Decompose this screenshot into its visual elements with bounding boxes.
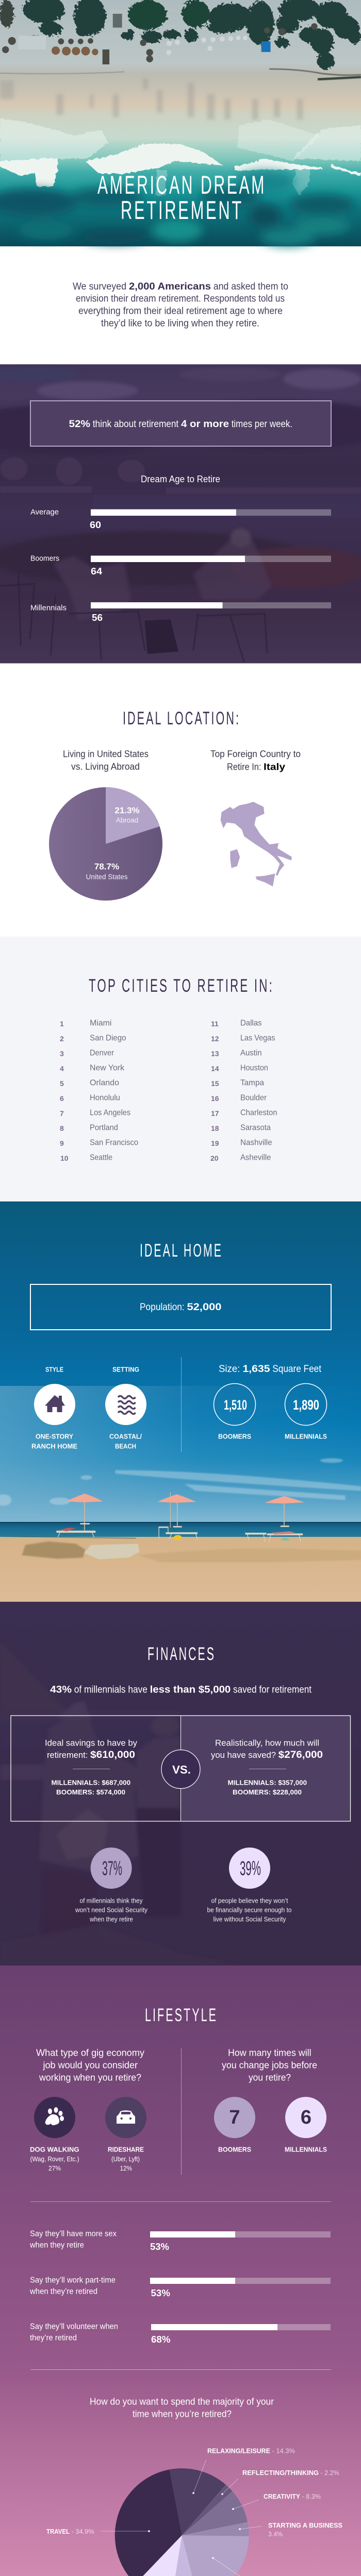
intro paragraph: and asked them to xyxy=(211,281,288,292)
heading: ideal home: IDEAL HOME xyxy=(140,1241,223,1261)
pie chart: how to spend time: RELAXING/LEISURE xyxy=(207,2448,270,2455)
pie chart: how to spend time: 3.4% xyxy=(268,2531,283,2538)
ranked list: cities 11-20: Las Vegas xyxy=(240,1033,275,1043)
stat: 39% social security xyxy=(207,1848,292,1923)
job change question: you change jobs before xyxy=(222,2060,317,2070)
ranked list: cities 1-10: 9 xyxy=(60,1139,64,1147)
stat: 37% social security xyxy=(75,1848,147,1923)
gig economy question: working when you retire? xyxy=(39,2072,141,2082)
pie chart: how to spend time: TRAVEL xyxy=(46,2528,70,2535)
gig economy question: What type of gig economy xyxy=(36,2047,145,2058)
bar chart: dream age to retire: Millennials xyxy=(30,604,67,612)
gig option: rideshare: RIDESHARE xyxy=(108,2145,144,2154)
realistic savings: BOOMERS: $228,000 xyxy=(233,1788,302,1796)
title: RETIREMENT xyxy=(121,196,243,225)
icon: waves xyxy=(118,1396,135,1414)
job change question xyxy=(222,2047,317,2082)
panel: ideal home xyxy=(0,1201,361,1602)
gig option: rideshare xyxy=(105,2097,146,2172)
stat: 39% social security: be financially secure enough to xyxy=(207,1906,292,1913)
ranked list: cities 1-10: San Diego xyxy=(90,1033,126,1043)
ranked list: cities 1-10: Portland xyxy=(90,1123,118,1132)
question: spending time: time when you’re retired? xyxy=(133,2408,232,2419)
intro paragraph: they’d like to be living when they retire. xyxy=(101,318,259,329)
ranked list: cities 1-10: 4 xyxy=(60,1064,64,1073)
ranked list: cities 1-10: 3 xyxy=(60,1049,64,1058)
realistic savings xyxy=(211,1738,323,1796)
question: spending time xyxy=(90,2396,274,2419)
ranked list: cities 11-20: Asheville xyxy=(240,1153,271,1162)
icon: paw xyxy=(45,2107,64,2125)
panel: ideal location: Top Foreign Country to xyxy=(210,748,301,759)
ranked list: cities 1-10: Seattle xyxy=(90,1153,112,1162)
ranked list: cities 11-20: 17 xyxy=(211,1109,219,1117)
job change question: you retire? xyxy=(249,2072,291,2082)
setting: coastal beach: BEACH xyxy=(115,1443,136,1450)
style: one-story ranch home: ONE-STORY xyxy=(36,1432,73,1440)
pie chart title: Living in United States xyxy=(63,748,149,759)
style: one-story ranch home: RANCH HOME xyxy=(31,1443,77,1450)
ranked list: cities 11-20: 19 xyxy=(211,1139,219,1147)
stat: 37% social security: of millennials think they xyxy=(79,1897,143,1904)
job changes: boomers: BOOMERS xyxy=(218,2145,251,2154)
callout: 52% box: times per week. xyxy=(229,418,292,430)
realistic savings: Realistically, how much will xyxy=(215,1738,319,1748)
gig option: dog walking xyxy=(30,2097,79,2172)
stat: 37% social security: 37% xyxy=(102,1858,122,1879)
gig option: dog walking: 27% xyxy=(48,2165,61,2172)
bar chart: dream age to retire: Boomers xyxy=(30,554,59,563)
ranked list: cities 11-20: 13 xyxy=(211,1049,219,1058)
stat: 39% social security: 39% xyxy=(240,1858,261,1879)
intro paragraph: 2,000 Americans xyxy=(129,281,211,292)
icon: car xyxy=(117,2110,135,2124)
stat: 43% of millennials: 43% xyxy=(50,1684,72,1695)
ideal savings xyxy=(45,1738,137,1796)
bar chart: retirement plans: Say they’ll work part-time xyxy=(30,2276,116,2284)
ranked list: cities 11-20: 12 xyxy=(211,1035,219,1043)
gig option: rideshare: 12% xyxy=(120,2165,132,2172)
ranked list: cities 1-10: 6 xyxy=(60,1094,64,1103)
ideal savings: BOOMERS: $574,000 xyxy=(56,1788,125,1796)
ideal savings: $610,000 xyxy=(90,1750,135,1760)
pie chart: US vs abroad: 78.7% xyxy=(94,861,119,872)
pie chart: US vs abroad xyxy=(49,787,162,901)
size stats: 1,510 xyxy=(224,1397,247,1413)
realistic savings: MILLENNIALS: $357,000 xyxy=(228,1778,307,1787)
callout: population: 52,000 xyxy=(187,1301,222,1313)
pie chart: US vs abroad: United States xyxy=(86,873,128,881)
comparison box xyxy=(11,1716,351,1821)
ranked list: cities 1-10: Los Angeles xyxy=(90,1109,130,1117)
realistic savings: you have saved? xyxy=(211,1750,278,1760)
ranked list: cities 1-10: New York xyxy=(90,1063,125,1073)
ranked list: cities 11-20 xyxy=(210,1019,277,1162)
gig economy question: job would you consider xyxy=(43,2060,138,2070)
size stats: 1,890 xyxy=(293,1397,319,1413)
title xyxy=(97,171,266,225)
vs badge xyxy=(161,1750,200,1789)
panel: top cities xyxy=(0,937,361,1201)
ideal savings: retirement: xyxy=(47,1750,90,1760)
bar chart: dream age to retire: 64 xyxy=(91,566,102,577)
question: spending time: How do you want to spend the majority of your xyxy=(90,2396,274,2407)
panel: ideal location xyxy=(0,664,361,937)
ranked list: cities 11-20: 20 xyxy=(210,1154,219,1162)
ranked list: cities 1-10: Honolulu xyxy=(90,1093,120,1103)
ranked list: cities 11-20: 16 xyxy=(211,1094,219,1103)
ranked list: cities 11-20: 11 xyxy=(211,1020,219,1028)
size stats: Square Feet xyxy=(270,1363,322,1375)
ranked list: cities 1-10: 1 xyxy=(60,1020,64,1028)
intro paragraph: We surveyed xyxy=(73,281,129,292)
size stats: BOOMERS xyxy=(218,1432,251,1440)
pie chart: how to spend time xyxy=(46,2448,342,2576)
panel: finances xyxy=(0,1602,361,1965)
ideal savings: MILLENNIALS: $687,000 xyxy=(52,1778,130,1787)
stat: 37% social security: won’t need Social Security xyxy=(75,1906,147,1913)
ranked list: cities 11-20: Sarasota xyxy=(240,1123,271,1132)
ranked list: cities 1-10: 8 xyxy=(60,1124,64,1132)
map title: Retire In: xyxy=(227,761,264,772)
icon: house xyxy=(45,1395,65,1412)
size stats: Size: xyxy=(219,1363,242,1375)
bar chart: retirement plans: 53% xyxy=(150,2242,169,2252)
heading: ideal location: IDEAL LOCATION: xyxy=(123,708,240,728)
stat: 43% of millennials: saved for retirement xyxy=(231,1684,312,1695)
bar chart: dream age to retire: 56 xyxy=(92,613,103,623)
callout: 52% box: 4 or more xyxy=(181,418,229,430)
bar chart: retirement plans: Say they’ll have more sex xyxy=(30,2230,117,2238)
ranked list: cities 1-10: Orlando xyxy=(90,1079,119,1087)
stat: 39% social security: of people believe they won’t xyxy=(211,1897,288,1904)
setting: coastal beach xyxy=(105,1365,146,1450)
photo background: couple by the sea xyxy=(0,1641,361,1965)
stat: 37% social security: when they retire xyxy=(89,1916,133,1923)
style: one-story ranch home xyxy=(31,1365,77,1450)
size stats: MILLENNIALS xyxy=(285,1432,327,1440)
pie chart: how to spend time: STARTING A BUSINESS xyxy=(268,2522,342,2529)
pie chart: US vs abroad: 21.3% xyxy=(114,806,140,815)
ranked list: cities 11-20: Tampa xyxy=(240,1079,264,1087)
ranked list: cities 1-10: 10 xyxy=(60,1154,69,1162)
bar chart: retirement plans: when they retire xyxy=(29,2241,84,2249)
bar chart: dream age to retire: Average xyxy=(30,508,59,516)
size stats: 1,635 xyxy=(242,1363,270,1375)
ranked list: cities 11-20: Houston xyxy=(240,1063,268,1073)
ranked list: cities 11-20: 18 xyxy=(211,1124,219,1132)
ranked list: cities 11-20: Charleston xyxy=(240,1109,277,1117)
bar chart: retirement plans: they’re retired xyxy=(30,2334,77,2342)
bar chart: retirement plans: when they’re retired xyxy=(29,2287,97,2296)
setting: coastal beach: COASTAL/ xyxy=(109,1432,142,1440)
pie chart: how to spend time: - 8.3% xyxy=(300,2493,321,2500)
callout: 52% box: 52% xyxy=(69,418,90,430)
job changes: millennials: 6 xyxy=(301,2107,311,2128)
pie chart: how to spend time: REFLECTING/THINKING xyxy=(242,2469,319,2477)
stat: 43% of millennials: less than $5,000 xyxy=(150,1684,231,1695)
ranked list: cities 11-20: 15 xyxy=(211,1079,219,1088)
job changes: boomers: 7 xyxy=(229,2107,240,2128)
setting: coastal beach: SETTING xyxy=(112,1365,139,1374)
heading: lifestyle: LIFESTYLE xyxy=(145,2005,218,2025)
pie chart title: vs. Living Abroad xyxy=(71,761,140,772)
realistic savings: $276,000 xyxy=(278,1750,323,1760)
bar chart: dream age to retire: Dream Age to Retire xyxy=(141,474,220,484)
intro paragraph: envision their dream retirement. Respondents told us xyxy=(76,294,285,304)
bar chart: retirement plans: Say they’ll volunteer when xyxy=(30,2323,118,2331)
callout: population: Population: xyxy=(140,1301,187,1313)
callout: 52% box: think about retirement xyxy=(90,418,181,430)
hero photo: aerial beach xyxy=(0,0,361,246)
bar chart: retirement plans xyxy=(29,2230,331,2345)
ranked list: cities 1-10: San Francisco xyxy=(90,1139,138,1147)
gig option: rideshare: (Uber, Lyft) xyxy=(111,2156,140,2163)
job change question: How many times will xyxy=(228,2047,311,2058)
ranked list: cities 11-20: Nashville xyxy=(240,1139,272,1147)
job changes: boomers xyxy=(214,2097,255,2154)
ranked list: cities 1-10: 5 xyxy=(60,1079,64,1088)
pie chart: how to spend time: - 2.2% xyxy=(319,2469,339,2477)
heading: finances: FINANCES xyxy=(147,1644,216,1664)
panel: retirement thoughts and dream age xyxy=(0,364,361,664)
bar chart: dream age to retire xyxy=(30,474,331,623)
bar chart: retirement plans: 68% xyxy=(151,2334,170,2345)
bar chart: dream age to retire: 60 xyxy=(90,520,101,530)
vs badge: VS. xyxy=(172,1763,191,1776)
pie chart: how to spend time: CREATIVITY xyxy=(264,2493,301,2500)
ranked list: cities 1-10: 2 xyxy=(60,1035,64,1043)
stat: 43% of millennials: of millennials have xyxy=(72,1684,150,1695)
ranked list: cities 1-10: Miami xyxy=(90,1019,111,1027)
pie chart: how to spend time: - 34.9% xyxy=(70,2528,94,2535)
size stats xyxy=(214,1363,327,1440)
ranked list: cities 11-20: Boulder xyxy=(240,1093,267,1103)
ranked list: cities 11-20: 14 xyxy=(211,1064,219,1073)
ranked list: cities 1-10 xyxy=(60,1019,138,1162)
style: one-story ranch home: STYLE xyxy=(45,1365,63,1374)
photo: beach with umbrellas xyxy=(0,1458,361,1602)
ranked list: cities 1-10: 7 xyxy=(60,1109,64,1117)
callout: 52% box xyxy=(30,401,331,446)
pie chart: US vs abroad: Abroad xyxy=(116,816,138,824)
gig economy question xyxy=(36,2047,145,2082)
callout: population xyxy=(30,1284,331,1330)
stat: 39% social security: live without Social Security xyxy=(214,1916,286,1923)
icon: map of Italy xyxy=(221,802,292,887)
map title: Italy xyxy=(264,761,286,772)
bar chart: retirement plans: 53% xyxy=(151,2288,170,2298)
ranked list: cities 11-20: Dallas xyxy=(240,1019,262,1027)
gig option: dog walking: (Wag, Rover, Etc.) xyxy=(30,2156,79,2163)
pie callouts xyxy=(101,2460,261,2576)
ranked list: cities 11-20: Austin xyxy=(240,1049,262,1057)
job changes: millennials xyxy=(285,2097,327,2154)
ideal savings: Ideal savings to have by xyxy=(45,1738,137,1748)
job changes: millennials: MILLENNIALS xyxy=(285,2145,327,2154)
pie chart: how to spend time: - 14.3% xyxy=(270,2448,295,2455)
intro paragraph: everything from their ideal retirement age to where xyxy=(78,306,283,316)
pie chart title xyxy=(63,748,149,772)
ranked list: cities 1-10: Denver xyxy=(90,1049,114,1057)
photo background: couple in a park xyxy=(0,364,361,664)
gig option: dog walking: DOG WALKING xyxy=(30,2145,79,2154)
panel: lifestyle xyxy=(0,1965,361,2576)
intro paragraph xyxy=(73,281,288,329)
